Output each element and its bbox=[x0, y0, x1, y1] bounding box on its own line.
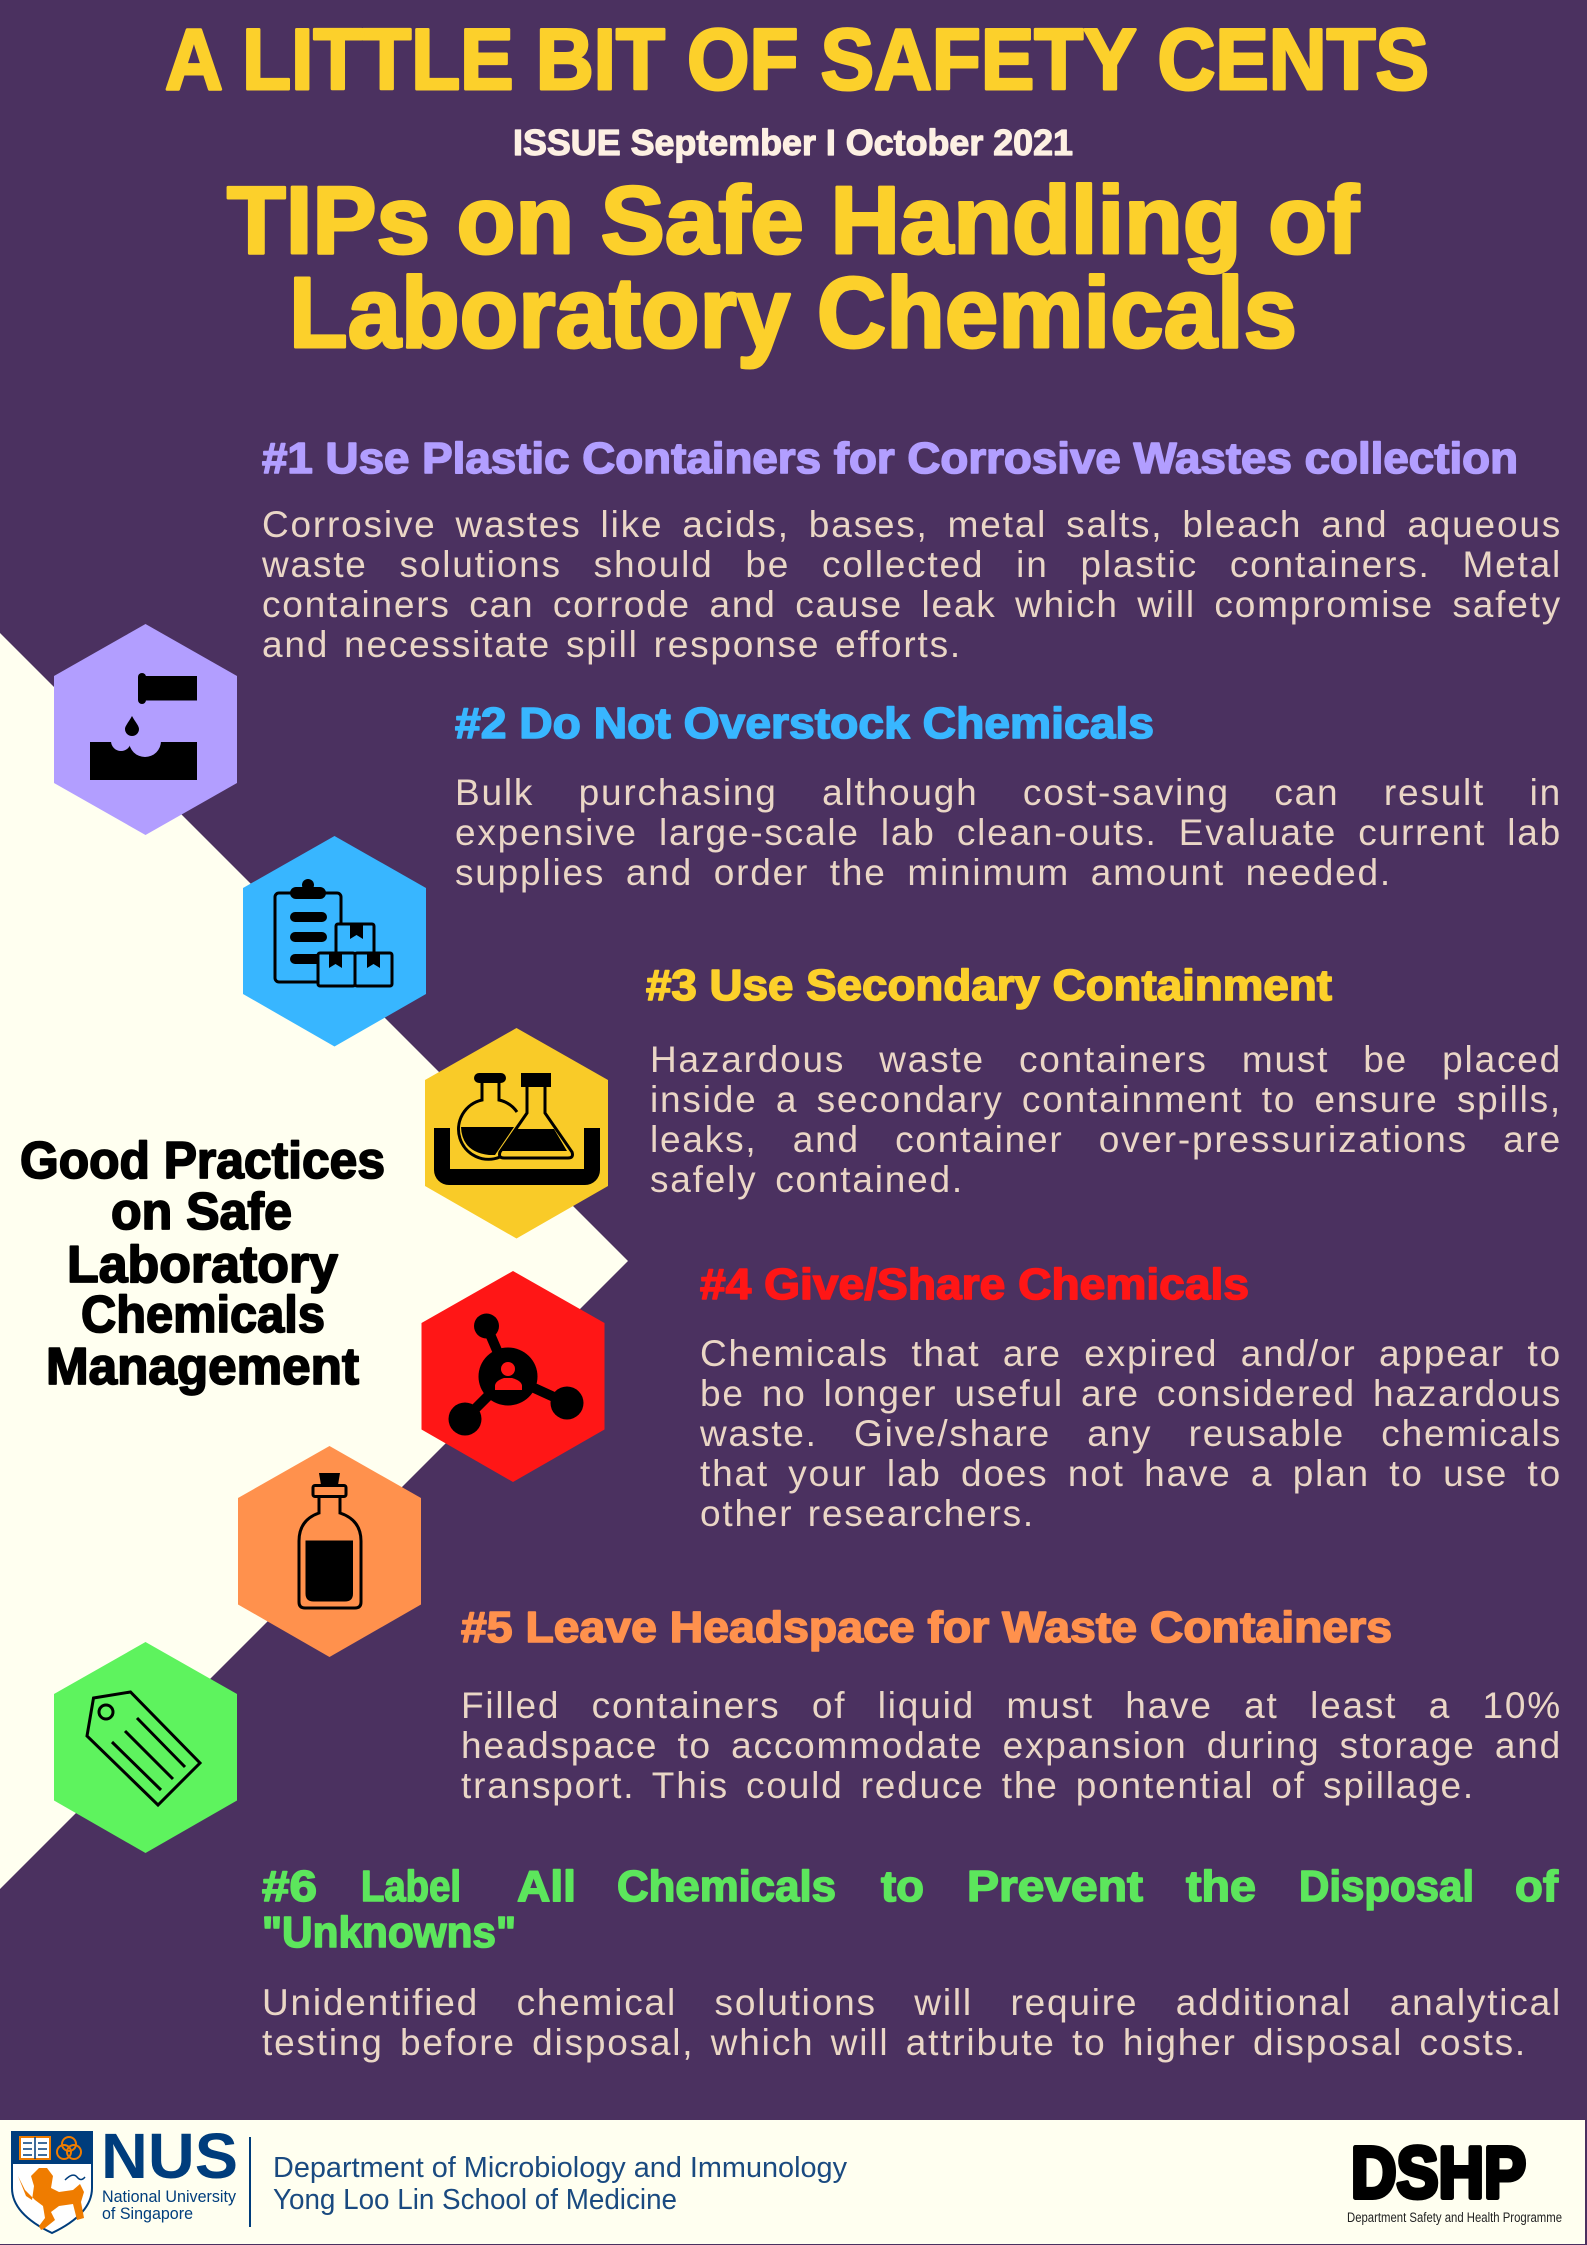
tip 4 text: be no longer useful are considered hazardous bbox=[700, 1373, 1562, 1414]
tip 6 heading: Disposal bbox=[1299, 1862, 1474, 1911]
tip 1 text: and necessitate spill response efforts. bbox=[262, 624, 962, 665]
tip 2: do not overstock bbox=[454, 699, 1562, 893]
tip 6 heading: #6 bbox=[262, 1862, 317, 1911]
tip 4 heading: #4 Give/Share Chemicals bbox=[700, 1260, 1249, 1309]
tip 3 text: leaks, and container over-pressurizations are bbox=[650, 1119, 1562, 1160]
tip 5 text: Filled containers of liquid must have at least a 10% bbox=[461, 1685, 1562, 1726]
tip 5: leave headspace bbox=[460, 1603, 1562, 1806]
tip 6: label all chemicals bbox=[262, 1862, 1562, 2063]
NUS wordmark: of Singapore bbox=[102, 2204, 193, 2223]
NUS wordmark bbox=[101, 2120, 238, 2223]
tip 2 text: expensive large-scale lab clean-outs. Evaluate current lab bbox=[455, 812, 1562, 853]
tip 1 text: Corrosive wastes like acids, bases, metal salts, bleach and aqueous bbox=[262, 504, 1562, 545]
side heading: good practices: on Safe bbox=[111, 1183, 292, 1241]
tip 4 text: Chemicals that are expired and/or appear to bbox=[700, 1333, 1562, 1374]
tip 5 text: headspace to accommodate expansion during storage and bbox=[461, 1725, 1562, 1766]
tip 4 text: that your lab does not have a plan to use to bbox=[700, 1453, 1562, 1494]
tip 3 text bbox=[650, 1039, 1562, 1200]
tip 6 heading bbox=[262, 1862, 1559, 1957]
tip 3: secondary containment bbox=[646, 961, 1562, 1200]
main heading: TIPs on Safe Handling of bbox=[227, 167, 1360, 274]
tip 1 text: waste solutions should be collected in plastic containers. Metal bbox=[262, 544, 1562, 585]
tip 5 heading: #5 Leave Headspace for Waste Containers bbox=[461, 1603, 1392, 1652]
department name bbox=[249, 2137, 847, 2227]
tip 6 heading: All bbox=[517, 1862, 576, 1911]
tip 6 text bbox=[262, 1982, 1562, 2063]
tip 5 text: transport. This could reduce the pontential of spillage. bbox=[461, 1765, 1475, 1806]
tip 6 text: testing before disposal, which will attribute to higher disposal costs. bbox=[262, 2022, 1527, 2063]
tip 2 text bbox=[455, 772, 1562, 893]
tip 3 heading: #3 Use Secondary Containment bbox=[646, 961, 1332, 1010]
tip 1 heading: #1 Use Plastic Containers for Corrosive Wastes collection bbox=[262, 434, 1518, 483]
tip 6 heading: of bbox=[1515, 1862, 1558, 1911]
tip 3 text: Hazardous waste containers must be placed bbox=[650, 1039, 1562, 1080]
tip 4: give or share chemicals bbox=[700, 1260, 1562, 1534]
NUS wordmark: NUS bbox=[101, 2120, 238, 2192]
main heading: Laboratory Chemicals bbox=[289, 257, 1297, 369]
title: A LITTLE BIT OF SAFETY CENTS bbox=[165, 12, 1429, 108]
tip 6 heading: to bbox=[881, 1862, 924, 1911]
side heading: good practices: Management bbox=[46, 1338, 359, 1396]
tip 4 text bbox=[700, 1333, 1562, 1534]
tip 4 text: other researchers. bbox=[700, 1493, 1035, 1534]
side heading: good practices bbox=[20, 1132, 385, 1396]
department name: Yong Loo Lin School of Medicine bbox=[273, 2184, 677, 2216]
tip 1 text bbox=[262, 504, 1562, 665]
tip 6 heading: Chemicals bbox=[617, 1862, 836, 1911]
tip 6 heading: Prevent bbox=[967, 1862, 1143, 1911]
NUS shield logo bbox=[11, 2131, 93, 2234]
tip 2 text: Bulk purchasing although cost-saving can result in bbox=[455, 772, 1562, 813]
tip 2 text: supplies and order the minimum amount needed. bbox=[455, 852, 1392, 893]
tip 6 heading: Label bbox=[361, 1862, 461, 1911]
department name: Department of Microbiology and Immunology bbox=[273, 2152, 847, 2184]
NUS wordmark: National University bbox=[102, 2187, 236, 2206]
tip 1 text: containers can corrode and cause leak which will compromise safety bbox=[262, 584, 1562, 625]
tip 5 text bbox=[461, 1685, 1562, 1806]
side heading: good practices: Chemicals bbox=[81, 1286, 325, 1344]
tip 6 text: Unidentified chemical solutions will require additional analytical bbox=[262, 1982, 1562, 2023]
tip 1: plastic containers bbox=[262, 434, 1562, 665]
DSHP logo: DSHP bbox=[1351, 2134, 1526, 2214]
tip 2 heading: #2 Do Not Overstock Chemicals bbox=[455, 699, 1154, 748]
footer band bbox=[0, 2120, 1585, 2244]
tip 6 heading: "Unknowns" bbox=[262, 1908, 516, 1957]
side heading: good practices: Laboratory bbox=[67, 1236, 338, 1294]
tip 3 text: inside a secondary containment to ensure spills, bbox=[650, 1079, 1562, 1120]
side heading: good practices: Good Practices bbox=[20, 1132, 385, 1190]
tip 4 text: waste. Give/share any reusable chemicals bbox=[700, 1413, 1562, 1454]
issue date: ISSUE September I October 2021 bbox=[513, 122, 1073, 163]
tip 3 text: safely contained. bbox=[650, 1159, 964, 1200]
tip 6 heading: the bbox=[1186, 1862, 1256, 1911]
main heading bbox=[226, 167, 1361, 370]
